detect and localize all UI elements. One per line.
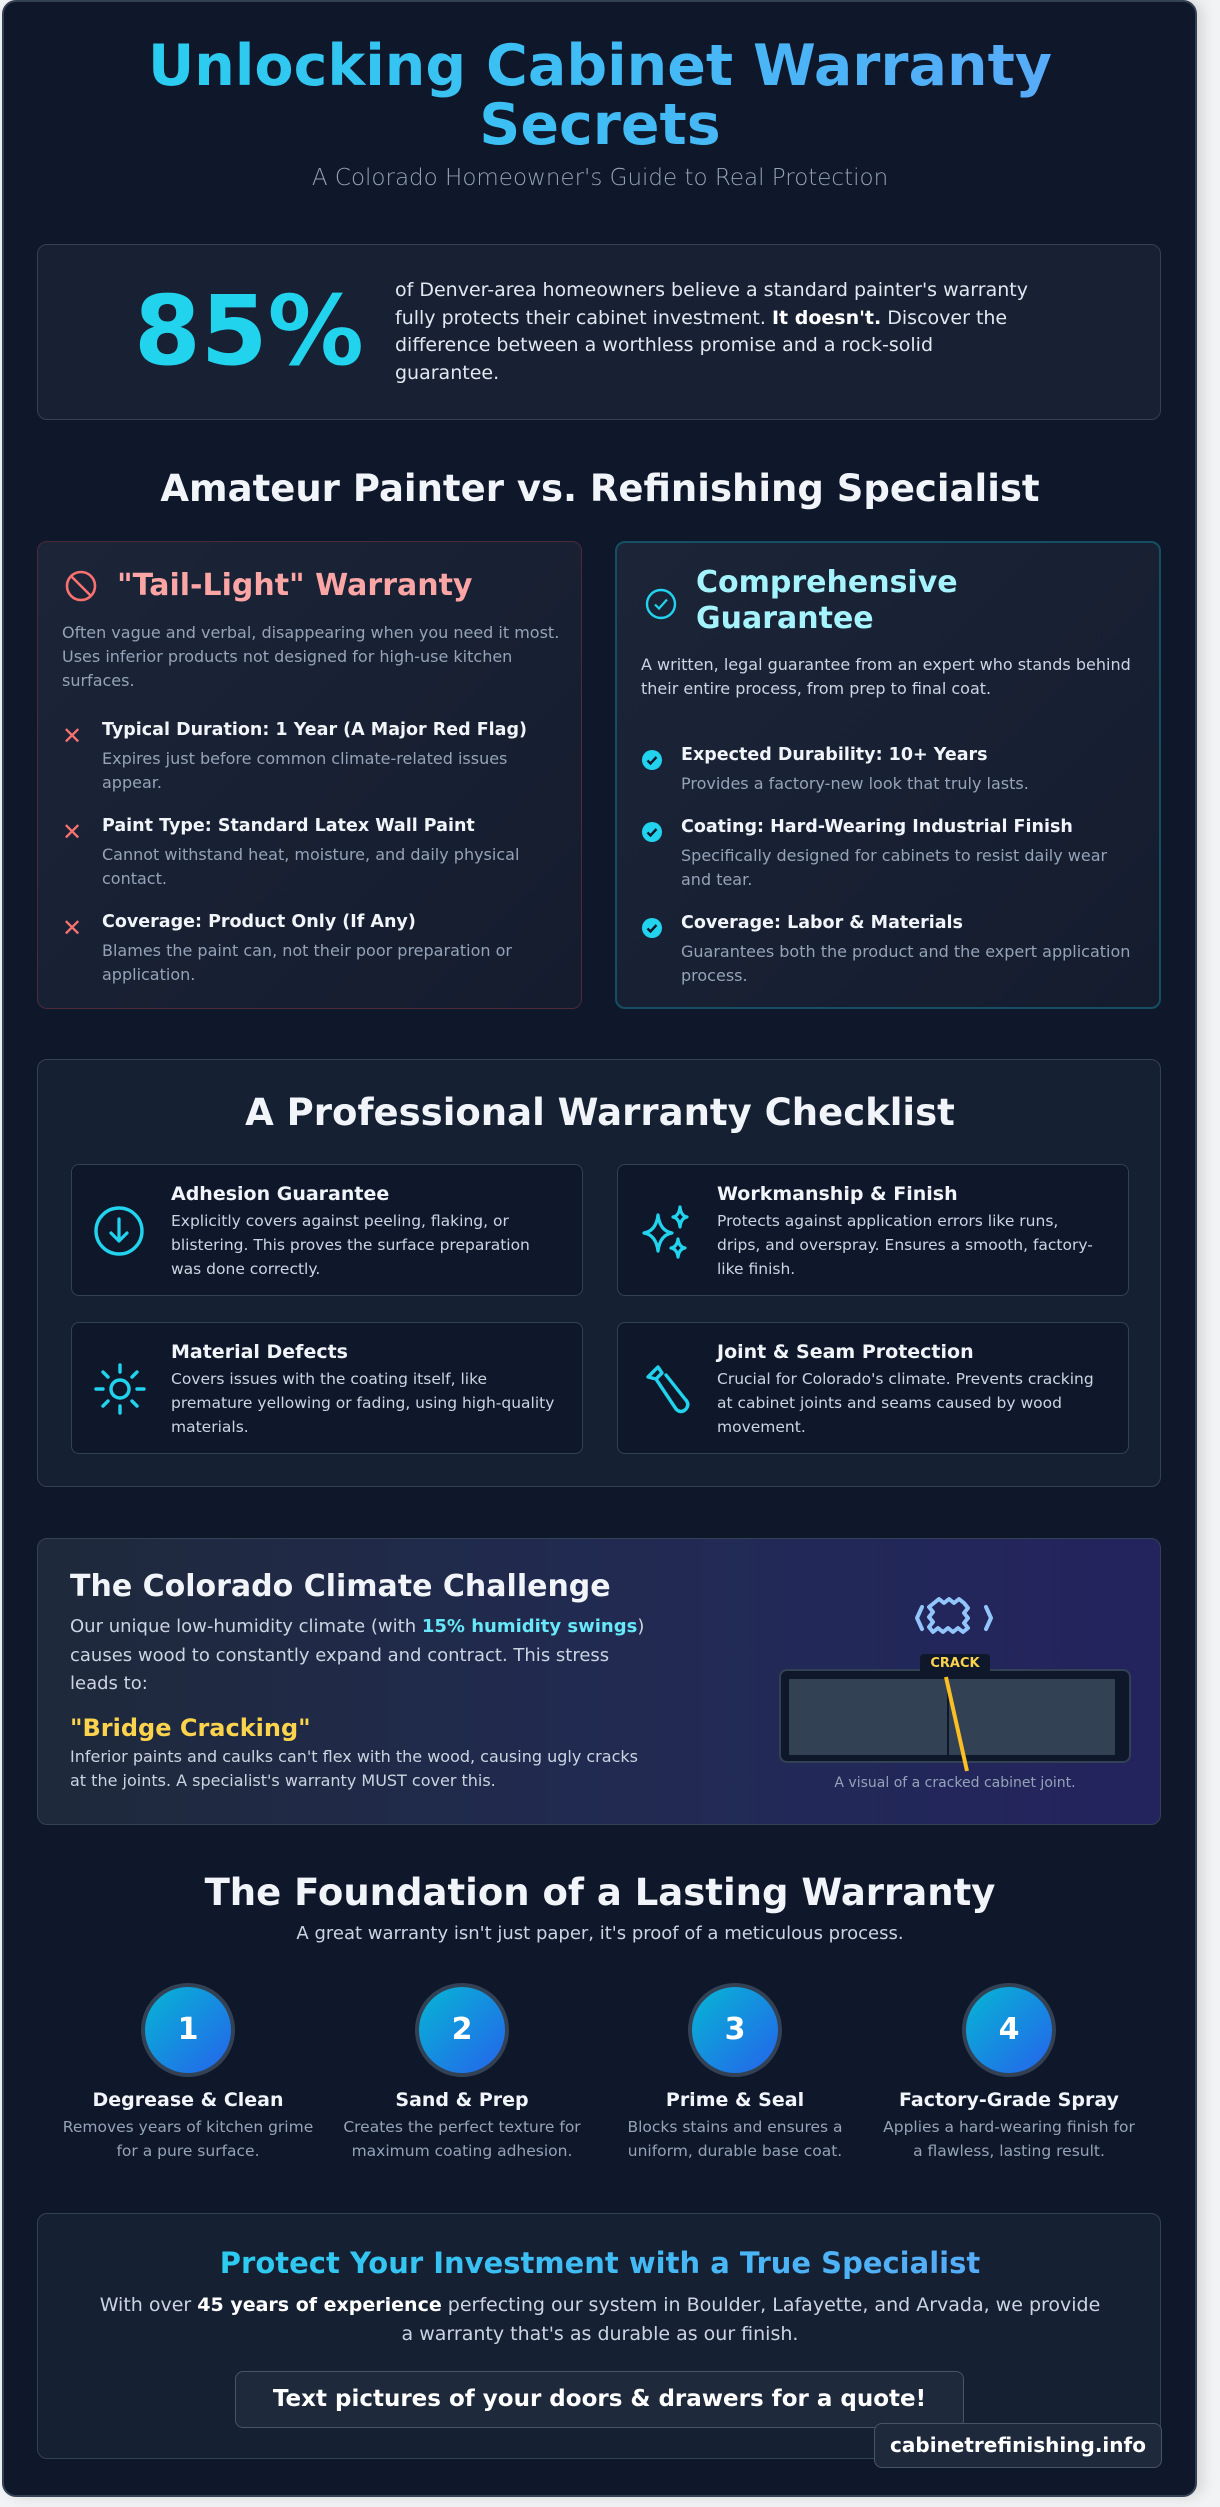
steps [63,1983,1135,2160]
icon: tool [646,1365,690,1414]
item 3 [642,913,1130,985]
panel: climate challenge [37,1538,1161,1825]
icon: expansion [915,1597,993,1634]
card description: Often vague and verbal, disappearing when you need it most. Uses inferior products not designed for high-use kitchen surfaces. [62,623,559,690]
item 1 [642,745,1029,793]
card: workmanship: Workmanship & Finish [717,1183,958,1205]
panel: tail-light warranty: Blames the paint can, not their poor preparation or application. [102,941,512,984]
card: adhesion: Explicitly covers against peeling, flaking, or blistering. This proves the surface preparation was done correctly. [171,1212,530,1278]
panel: tail-light warranty [37,541,582,1009]
card: material defects: Material Defects [171,1341,348,1363]
title: Secrets [479,92,721,158]
item 2 [642,817,1108,889]
icon: prohibited [66,570,96,602]
domain badge: cabinetrefinishing.info [890,2433,1146,2457]
stat panel [37,244,1161,420]
icon: sparkles [642,1205,689,1259]
climate text: Our unique low-humidity climate (with 15% humidity swings) causes wood to constantly expand and contract. This stress leads to: [70,1616,644,1694]
step 3 [627,1983,843,2160]
crack label: CRACK [930,1656,980,1671]
card title [696,565,958,636]
climate heading: The Colorado Climate Challenge [70,1569,611,1604]
card: adhesion [71,1164,583,1296]
cta button: Text pictures of your doors & drawers for a quote! [273,2386,926,2412]
panel: comprehensive guarantee: Provides a factory-new look that truly lasts. [681,774,1029,793]
step 1: Removes years of kitchen grime [63,2118,313,2136]
checklist heading: A Professional Warranty Checklist [245,1091,955,1134]
bridge cracking text: Inferior paints and caulks can't flex with the wood, causing ugly cracks at the joints. A specialist's warranty MUST cover this. [70,1747,638,1790]
panel: tail-light warranty: Typical Duration: 1 Year (A Major Red Flag) [102,720,527,740]
panel: comprehensive guarantee: Coating: Hard-Wearing Industrial Finish [681,817,1073,837]
panel: tail-light warranty: Expires just before common climate-related issues appear. [102,749,507,792]
caption: A visual of a cracked cabinet joint. [834,1775,1076,1791]
panel: comprehensive guarantee: Expected Durability: 10+ Years [681,745,988,765]
subtitle: A Colorado Homeowner's Guide to Real Protection [312,165,888,191]
step 4: Applies a hard-wearing finish for [883,2118,1135,2136]
step 4: 4 [999,2012,1019,2047]
card: adhesion: Adhesion Guarantee [171,1183,389,1205]
card: material defects [71,1322,583,1454]
panel: tail-light warranty: ✕ [62,722,82,750]
card: material defects: Covers issues with the coating itself, like premature yellowing or fading, using high-quality materials. [171,1370,554,1436]
cabinet joint [779,1669,1131,1763]
step 2 [343,1983,581,2160]
cta heading: Protect Your Investment with a True Specialist [220,2246,980,2280]
card title: Guarantee [696,601,874,636]
step 2: Sand & Prep [395,2089,529,2111]
stat number: 85% [134,275,364,387]
stat text: of Denver-area homeowners believe a standard painter's warranty fully protects their cabinet investment. It doesn't. Discover the difference between a worthless promise and a rock-solid guarantee. [395,279,1028,384]
card: workmanship: Protects against application errors like runs, drips, and overspray. Ensures a smooth, factory-like finish. [717,1212,1093,1278]
card: joint & seam [617,1322,1129,1454]
panel: call to action [37,2213,1161,2459]
panel: comprehensive guarantee [615,541,1161,1009]
foundation subtitle: A great warranty isn't just paper, it's proof of a meticulous process. [296,1923,904,1944]
step 1: 1 [178,2012,198,2047]
card title: "Tail-Light" Warranty [117,568,472,603]
item 2 [62,816,519,888]
step 2: 2 [452,2012,472,2047]
step 2: maximum coating adhesion. [352,2142,572,2160]
panel: comprehensive guarantee: Specifically designed for cabinets to resist daily wear and tear. [681,846,1107,889]
crack visual [779,1597,1131,1791]
card: joint & seam: Joint & Seam Protection [717,1341,974,1363]
step 3: Prime & Seal [666,2089,804,2111]
icon: sun [94,1363,146,1415]
item 1 [62,720,527,792]
step 3: uniform, durable base coat. [628,2142,842,2160]
step 4 [883,1983,1135,2160]
card description: A written, legal guarantee from an expert who stands behind their entire process, from prep to final coat. [641,655,1131,698]
panel: tail-light warranty: Paint Type: Standard Latex Wall Paint [102,816,475,836]
heading: foundation: The Foundation of a Lasting Warranty [205,1871,995,1914]
panel: tail-light warranty: ✕ [62,818,82,846]
title: Unlocking Cabinet Warranty [148,33,1052,99]
step 1: for a pure surface. [116,2142,260,2160]
step 3: 3 [725,2012,745,2047]
card: joint & seam: Crucial for Colorado's climate. Prevents cracking at cabinet joints and seams caused by wood movement. [717,1370,1094,1436]
step 1 [63,1983,313,2160]
cta heading [38,2246,1162,2280]
cta button [235,2371,964,2428]
icon: check circle [646,588,676,620]
panel: comprehensive guarantee: Guarantees both the product and the expert application process. [681,942,1130,985]
step 2: Creates the perfect texture for [343,2118,581,2136]
panel: tail-light warranty: Cannot withstand heat, moisture, and daily physical contact. [102,845,519,888]
panel: tail-light warranty: ✕ [62,914,82,942]
icon: arrow down circle [94,1206,144,1256]
domain badge [874,2423,1162,2468]
crack label [920,1654,990,1674]
panel: tail-light warranty: Coverage: Product Only (If Any) [102,912,416,932]
step 3: Blocks stains and ensures a [627,2118,843,2136]
panel: checklist [37,1059,1161,1487]
bridge cracking heading: "Bridge Cracking" [70,1714,311,1742]
cta text: With over 45 years of experience perfecting our system in Boulder, Lafayette, and Arvada, we provide a warranty that's as durable as our finish. [100,2294,1100,2344]
title [0,37,1200,155]
step 4: Factory-Grade Spray [899,2089,1119,2111]
step 1: Degrease & Clean [92,2089,284,2111]
panel: comprehensive guarantee: Coverage: Labor & Materials [681,913,963,933]
heading: comparison: Amateur Painter vs. Refinishing Specialist [160,467,1040,510]
card: workmanship [617,1164,1129,1296]
step 4: a flawless, lasting result. [913,2142,1105,2160]
item 3 [62,912,512,984]
card title: Comprehensive [696,565,958,600]
